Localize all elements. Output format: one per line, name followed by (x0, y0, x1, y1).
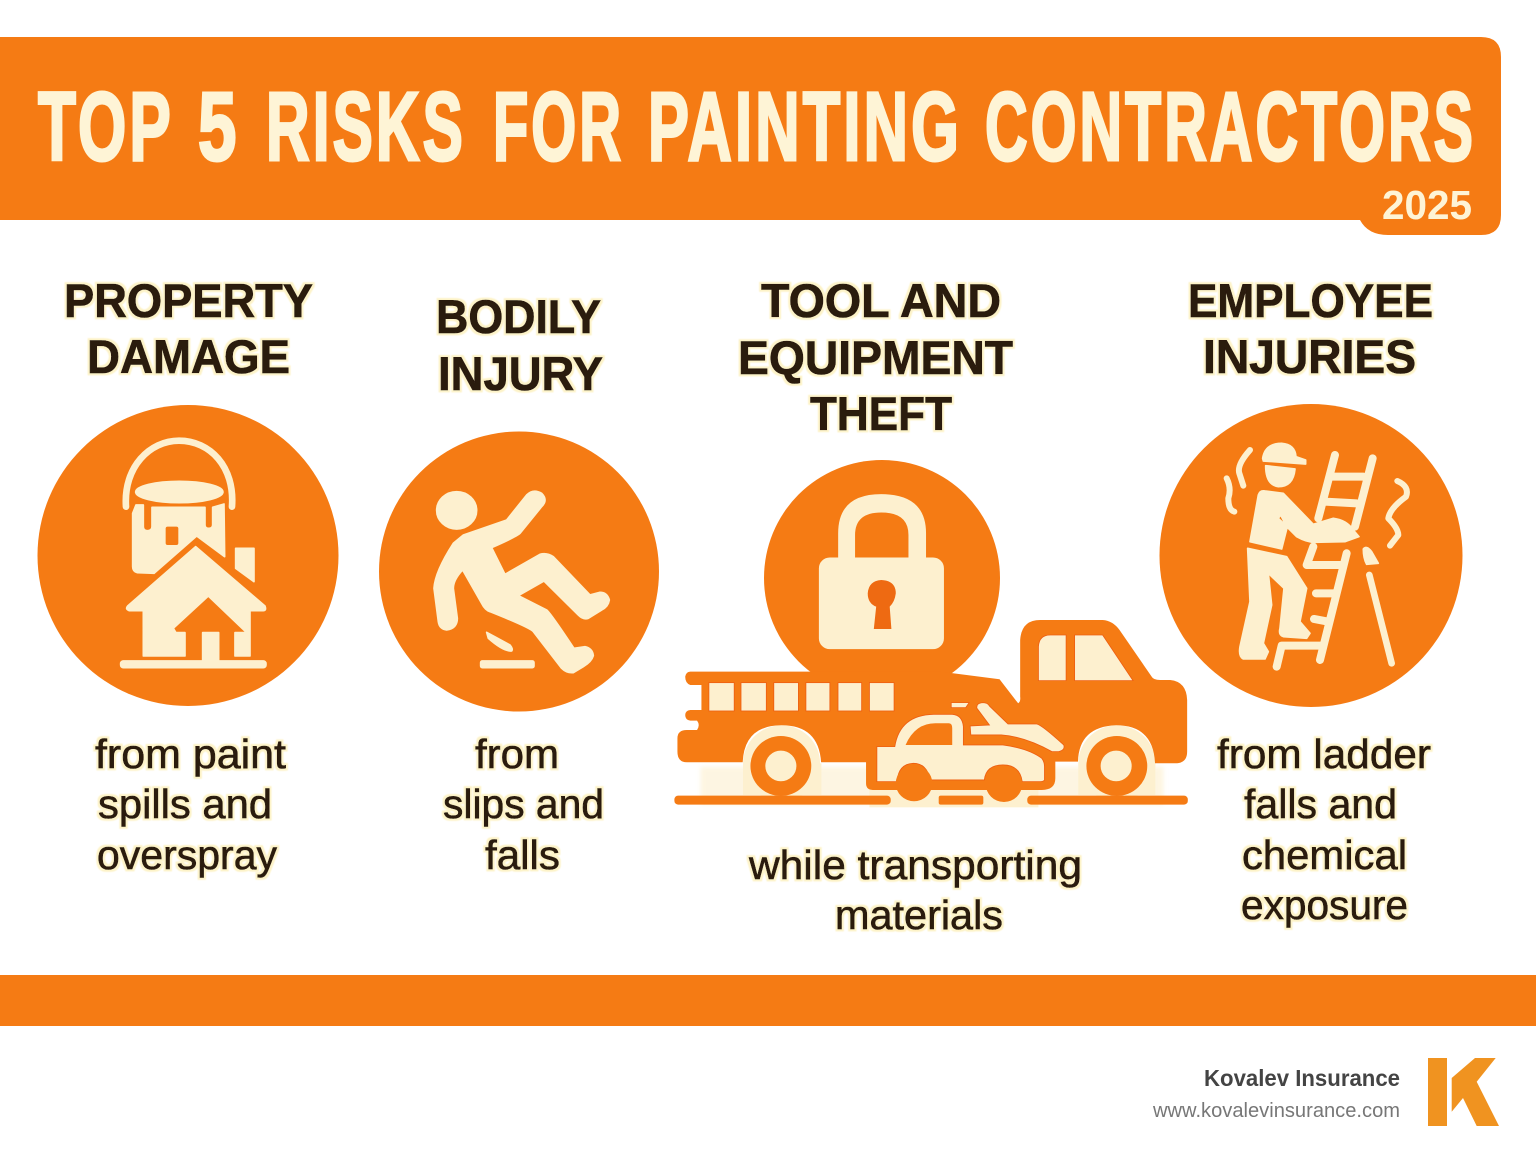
footer band (0, 975, 1536, 1026)
text: while transporting materials: while transporting (748, 842, 1082, 888)
text: from paint spills and overspray: from paint (95, 731, 287, 777)
panel: bodily injury (379, 290, 659, 878)
icon: paint can over house (38, 405, 338, 706)
heading: employee injuries: INJURIES (1203, 330, 1416, 383)
title: FOR (493, 72, 624, 181)
heading: property damage: DAMAGE (87, 330, 290, 383)
panel: employee injuries (1160, 274, 1462, 928)
title: TOP (38, 72, 174, 181)
icon: worker on ladder (1160, 404, 1462, 707)
text: from slips and falls (443, 731, 604, 878)
text: from ladder falls and chemical exposure: chemical (1242, 832, 1407, 878)
icon: padlock (820, 495, 943, 648)
title: 5 (198, 72, 240, 181)
panel: property damage (38, 274, 338, 878)
heading: employee injuries (1188, 274, 1433, 383)
heading: bodily injury: INJURY (438, 347, 603, 400)
heading: tool and equipment theft: EQUIPMENT (738, 331, 1013, 384)
heading: property damage: PROPERTY (64, 274, 313, 327)
icon: person slipping (379, 432, 659, 712)
text: from ladder falls and chemical exposure (1217, 731, 1431, 928)
text: from slips and falls: from (475, 731, 559, 777)
year label: 2025 (1382, 182, 1472, 228)
text: from paint spills and overspray: spills and (98, 781, 272, 827)
logo: K (1428, 1058, 1499, 1126)
text: while transporting materials (748, 842, 1082, 938)
title: PAINTING (648, 72, 962, 181)
heading: employee injuries: EMPLOYEE (1188, 274, 1433, 327)
website: www.kovalevinsurance.com (1152, 1100, 1400, 1122)
icon: padlock and truck (674, 460, 1188, 807)
header banner (0, 37, 1501, 235)
text: from ladder falls and chemical exposure: falls and (1244, 781, 1397, 827)
text: from paint spills and overspray (95, 731, 287, 878)
text: from slips and falls: slips and (443, 781, 604, 827)
heading: bodily injury (436, 290, 603, 400)
heading: tool and equipment theft (738, 274, 1013, 440)
text: from slips and falls: falls (485, 832, 560, 878)
company name: Kovalev Insurance (1204, 1065, 1400, 1091)
text: from ladder falls and chemical exposure: from ladder (1217, 731, 1431, 777)
heading: tool and equipment theft: TOOL AND (761, 274, 1001, 327)
title (38, 72, 1476, 181)
panel: tool and equipment theft (674, 274, 1188, 938)
text: from paint spills and overspray: overspray (97, 832, 277, 878)
icon: truck with car (674, 620, 1188, 807)
text: from ladder falls and chemical exposure: exposure (1241, 882, 1408, 928)
text: while transporting materials: materials (835, 892, 1003, 938)
heading: bodily injury: BODILY (436, 290, 601, 343)
heading: tool and equipment theft: THEFT (810, 387, 952, 440)
title: RISKS (266, 72, 466, 181)
heading: property damage (64, 274, 313, 383)
